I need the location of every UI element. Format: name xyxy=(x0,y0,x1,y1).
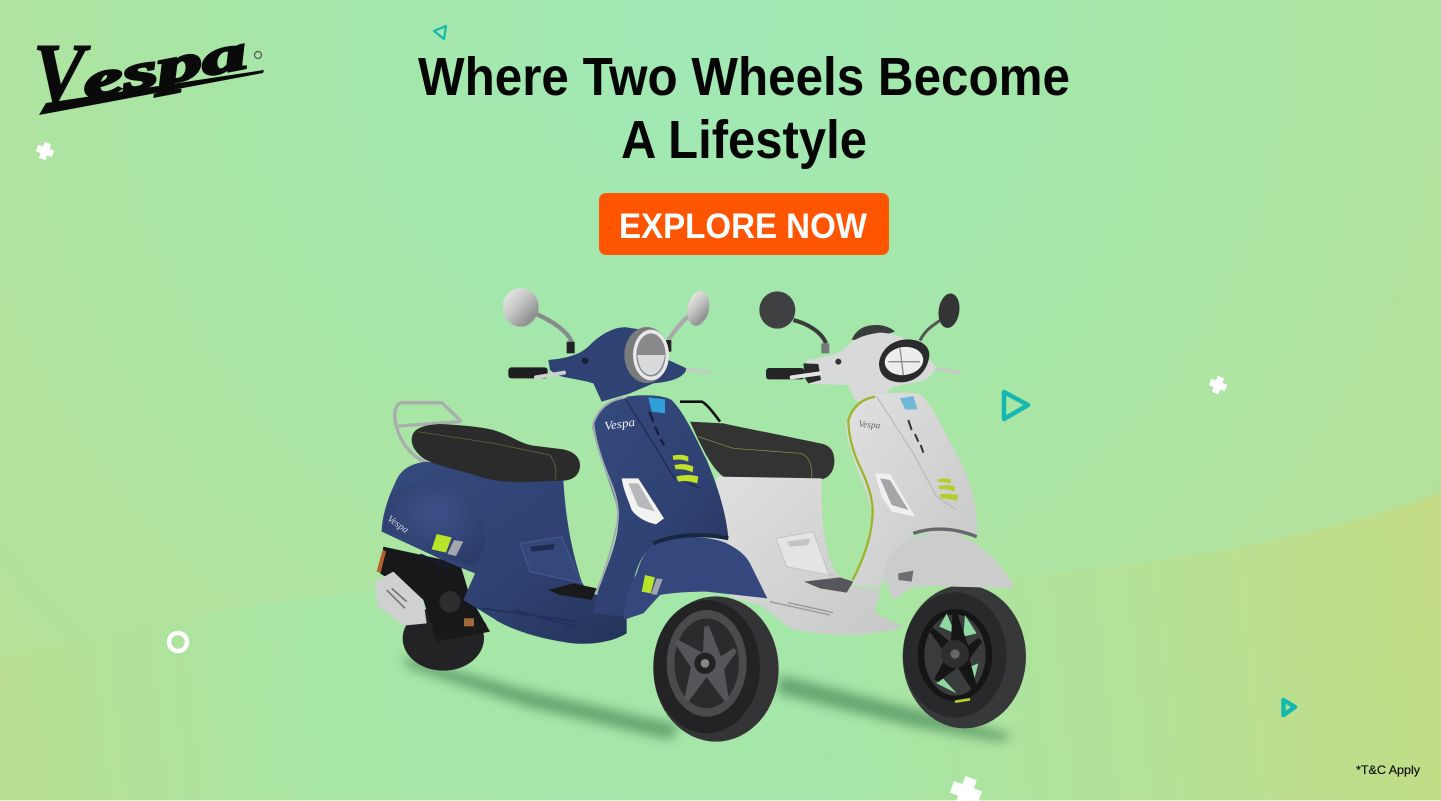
decorative icon: small teal triangle lower right xyxy=(1284,700,1295,715)
blue scooter side panel xyxy=(383,484,597,627)
title xyxy=(418,47,1070,170)
blue scooter rack xyxy=(395,403,462,463)
decorative icon: small teal triangle top xyxy=(434,26,446,39)
silver scooter front fender xyxy=(883,529,1014,601)
silver scooter trim xyxy=(848,396,958,580)
button: explore now xyxy=(599,193,889,255)
scooter: blue xyxy=(375,288,779,742)
silver scooter headlight xyxy=(879,339,929,382)
decorative icon: white plus top left xyxy=(34,140,56,162)
silver scooter leg shield xyxy=(846,392,977,588)
blue scooter rear body xyxy=(382,462,627,644)
blue scooter shadow xyxy=(400,655,680,740)
silver scooter trim: Vespa xyxy=(858,420,881,432)
blue scooter seat xyxy=(412,424,580,482)
silver scooter rack and seat xyxy=(680,402,834,482)
title: A Lifestyle xyxy=(621,110,867,170)
silver scooter head xyxy=(766,325,959,402)
silver scooter shadow xyxy=(777,675,1013,742)
logo: Vespa: V xyxy=(33,27,91,120)
blue scooter trim: Vespa xyxy=(603,415,636,433)
silver scooter mirrors xyxy=(759,291,962,353)
blue scooter leg shield xyxy=(592,395,728,617)
decorative icon: white ring xyxy=(169,633,187,651)
decorative icon: white plus bottom xyxy=(947,773,985,801)
blue scooter rear wheel xyxy=(403,606,484,671)
disclaimer: *T&C Apply xyxy=(1356,763,1420,777)
blue scooter front wheel xyxy=(653,596,779,742)
logo: Vespa: espa xyxy=(77,23,251,110)
blue scooter engine xyxy=(380,547,490,642)
blue scooter front fender xyxy=(623,535,767,620)
decorative icon: large teal triangle xyxy=(1004,392,1028,419)
scooter: silver xyxy=(680,291,1026,742)
blue scooter exhaust xyxy=(375,549,487,637)
blue scooter trim xyxy=(593,397,700,593)
blue scooter mirrors xyxy=(503,288,712,353)
silver scooter glovebox and mat xyxy=(770,532,853,615)
blue scooter head and handlebar xyxy=(508,327,709,402)
title: Where Two Wheels Become xyxy=(418,47,1070,107)
button: explore now: EXPLORE NOW xyxy=(619,207,867,246)
decorative icon: white plus right xyxy=(1207,374,1229,396)
silver scooter body xyxy=(713,477,903,635)
logo: Vespa xyxy=(33,23,264,120)
blue scooter side panel: Vespa xyxy=(385,513,410,536)
silver scooter front wheel xyxy=(903,585,1026,728)
